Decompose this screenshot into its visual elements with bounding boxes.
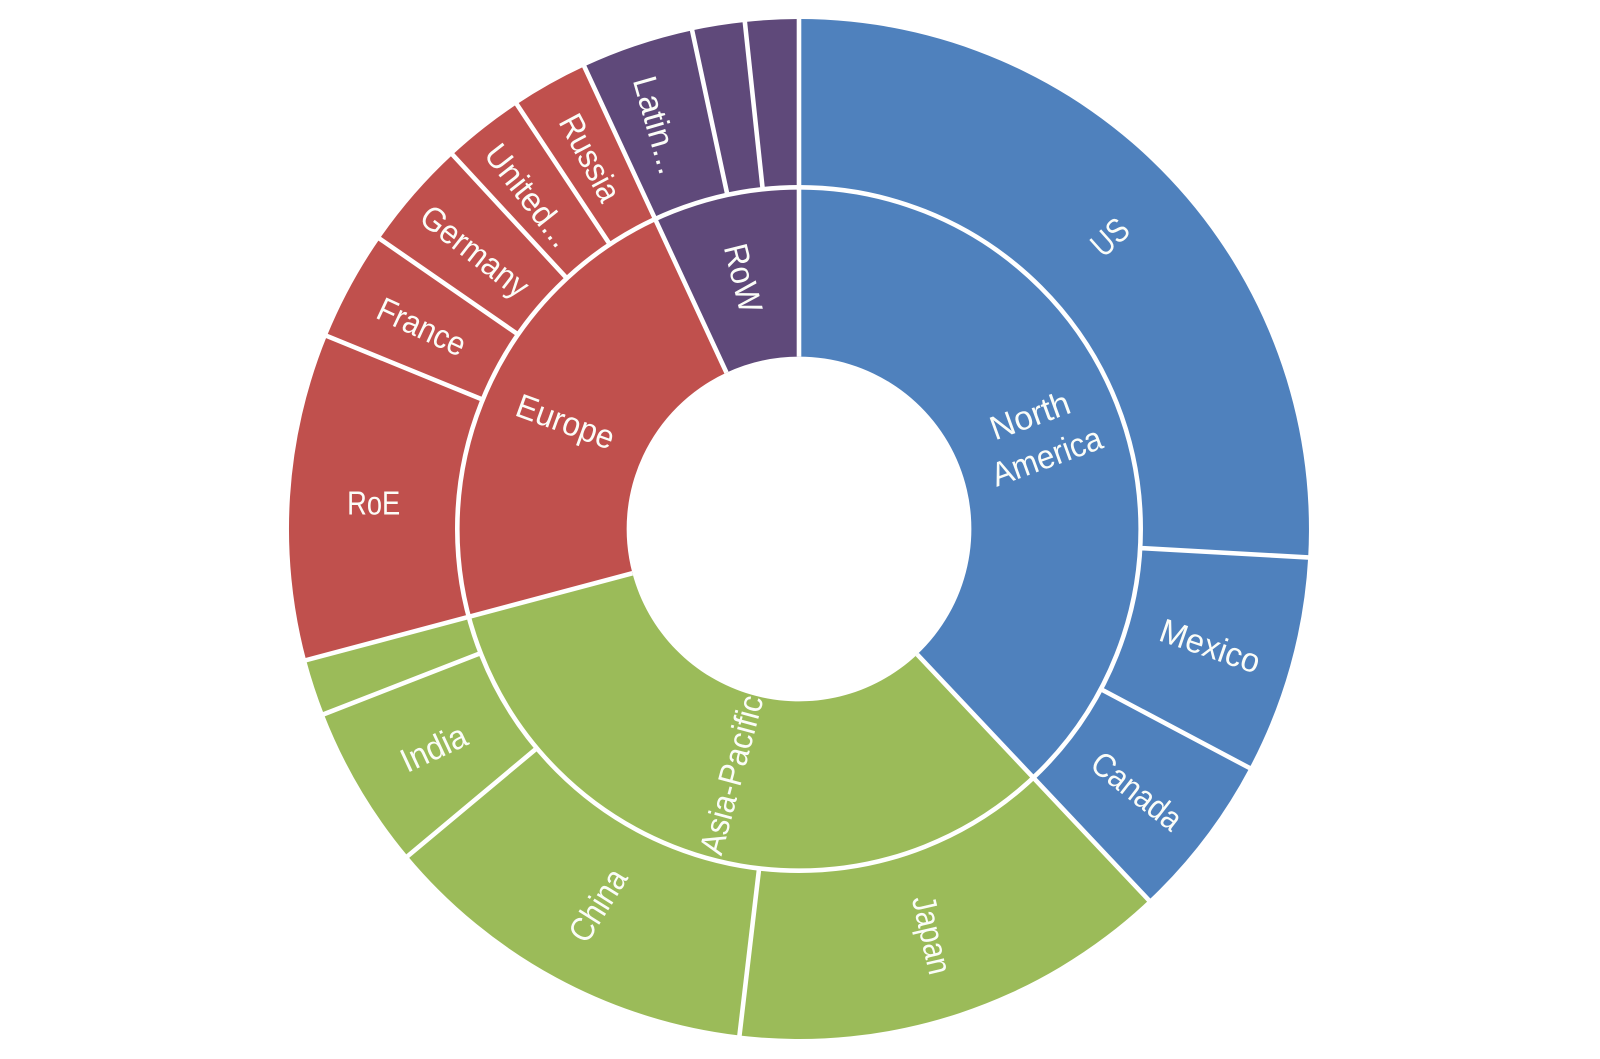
segment: other Asia-Pacific <box>306 617 481 714</box>
segment: Europe <box>457 219 726 617</box>
segment: India <box>324 653 537 856</box>
inner ring: regions <box>457 187 1141 871</box>
segment: Latin... <box>584 30 727 219</box>
segment: Europe: Europe <box>511 388 619 457</box>
segment: Germany: Germany <box>413 198 536 306</box>
segment: other RoW 1 <box>692 22 763 195</box>
segment: China: China <box>562 862 636 949</box>
segment: Mexico: Mexico <box>1155 613 1265 681</box>
segment: RoE: RoE <box>347 486 400 523</box>
segment: United...: United... <box>477 137 580 255</box>
segment: United... <box>453 104 610 278</box>
segment: Japan: Japan <box>904 892 958 978</box>
segment: RoW: RoW <box>716 240 769 317</box>
segment: France: France <box>371 291 472 364</box>
segment: China <box>408 748 759 1036</box>
segment: India: India <box>395 717 474 780</box>
segment: Asia-Pacific: Asia-Pacific <box>693 691 771 859</box>
segment: Asia-Pacific <box>469 573 1033 871</box>
segment: Mexico <box>1101 548 1308 768</box>
segment: Japan <box>740 778 1149 1039</box>
segment: Russia: Russia <box>551 108 628 208</box>
segment: US <box>799 19 1309 557</box>
outer ring: countries <box>289 19 1309 1039</box>
segment: RoE <box>289 336 483 660</box>
segment: North America <box>799 187 1141 778</box>
segment: Russia <box>517 66 655 244</box>
segment: US: US <box>1084 211 1137 265</box>
segment: Germany <box>380 155 567 334</box>
segment: Latin...: Latin... <box>625 72 688 178</box>
segment: RoW <box>655 187 799 373</box>
segment: Canada <box>1033 689 1249 900</box>
segment: other RoW 2 <box>745 19 799 189</box>
segment: France <box>327 239 518 400</box>
segment: Canada: Canada <box>1083 745 1189 839</box>
segment: North America: North <box>985 385 1075 448</box>
segment: North America: America <box>987 420 1108 494</box>
